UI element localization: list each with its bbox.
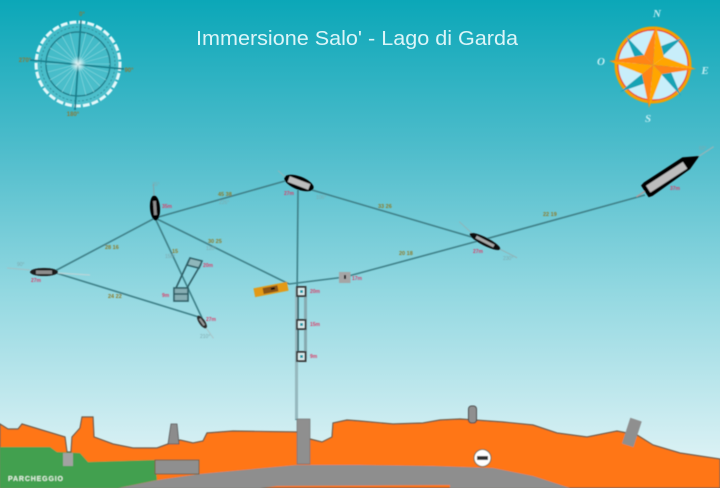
wreck: ship top left [148, 184, 161, 221]
wreck: small boat lower [195, 314, 216, 340]
bearing labels: 20 18 [399, 251, 413, 257]
depth labels: 15m [310, 322, 321, 328]
secondary route notes: 210° [200, 334, 210, 340]
icon: compass rose [597, 8, 709, 125]
title: Immersione Salo' - Lago di Garda [196, 28, 519, 50]
secondary route notes: 106° [316, 195, 326, 201]
parking area: PARCHEGGIO [8, 476, 64, 483]
depth labels: 27m [31, 278, 42, 284]
wreck: small ship centre right [455, 222, 520, 261]
pier: small left [168, 424, 179, 444]
bearing labels: 45 38 [218, 192, 232, 198]
secondary route notes [17, 146, 707, 340]
depth labels: 20m [310, 289, 321, 295]
training platforms column [295, 287, 307, 419]
depth labels: 35m [162, 204, 173, 210]
bearing labels: 33 26 [378, 204, 392, 210]
depth labels: 27m [284, 191, 295, 197]
icon: compass rose: S [645, 113, 651, 125]
barge structure [174, 258, 202, 301]
wreck: ship top [274, 168, 316, 195]
wreck: orange boat [253, 282, 289, 297]
bearing labels: 15 [172, 249, 178, 255]
secondary route notes: 90° [17, 262, 25, 268]
depth labels: 9m [162, 293, 170, 299]
wreck: ship far left [7, 268, 90, 276]
icon: depth dial [19, 12, 134, 118]
secondary route notes: 230° [503, 256, 513, 262]
pier: channel block [63, 453, 73, 466]
depth labels: 17m [352, 276, 363, 282]
depth labels: 27m [473, 249, 484, 255]
icon: depth dial: 180° [67, 112, 80, 118]
icon: road sign [474, 450, 491, 466]
bearing labels: 30 25 [208, 239, 222, 245]
icon: compass rose: O [597, 56, 605, 68]
dive route lines [53, 181, 645, 420]
depth labels: 27m [206, 317, 217, 323]
depth labels: 9m [310, 354, 318, 360]
depth labels: 37m [670, 186, 681, 192]
icon: depth dial: 270° [19, 58, 32, 64]
pier: large central [297, 419, 310, 464]
bearing labels: 22 19 [543, 212, 557, 218]
depth labels: 20m [203, 263, 214, 269]
icon: compass rose: N [652, 8, 662, 20]
icon: depth dial: 0° [79, 12, 85, 18]
bearing labels: 24 22 [108, 294, 122, 300]
parking area [0, 447, 157, 488]
pier: top right [468, 406, 476, 423]
secondary route notes: 60° [699, 146, 707, 152]
platform: small grey block [339, 272, 350, 283]
bearing labels [105, 192, 557, 300]
secondary route notes: 150° [165, 254, 175, 260]
pier: tilted right [622, 418, 642, 447]
secondary route notes: 120° [206, 246, 216, 252]
road [118, 465, 570, 488]
secondary route notes: 35° [152, 182, 160, 188]
secondary route notes: 226° [219, 200, 229, 206]
depth labels [31, 186, 681, 360]
icon: depth dial: 90° [124, 68, 134, 74]
icon: compass rose: E [700, 65, 709, 77]
pier: rectangular dock [155, 460, 199, 474]
bearing labels: 28 16 [105, 245, 119, 251]
wreck: large ship right [632, 140, 718, 203]
land: lakeshore [0, 417, 720, 488]
